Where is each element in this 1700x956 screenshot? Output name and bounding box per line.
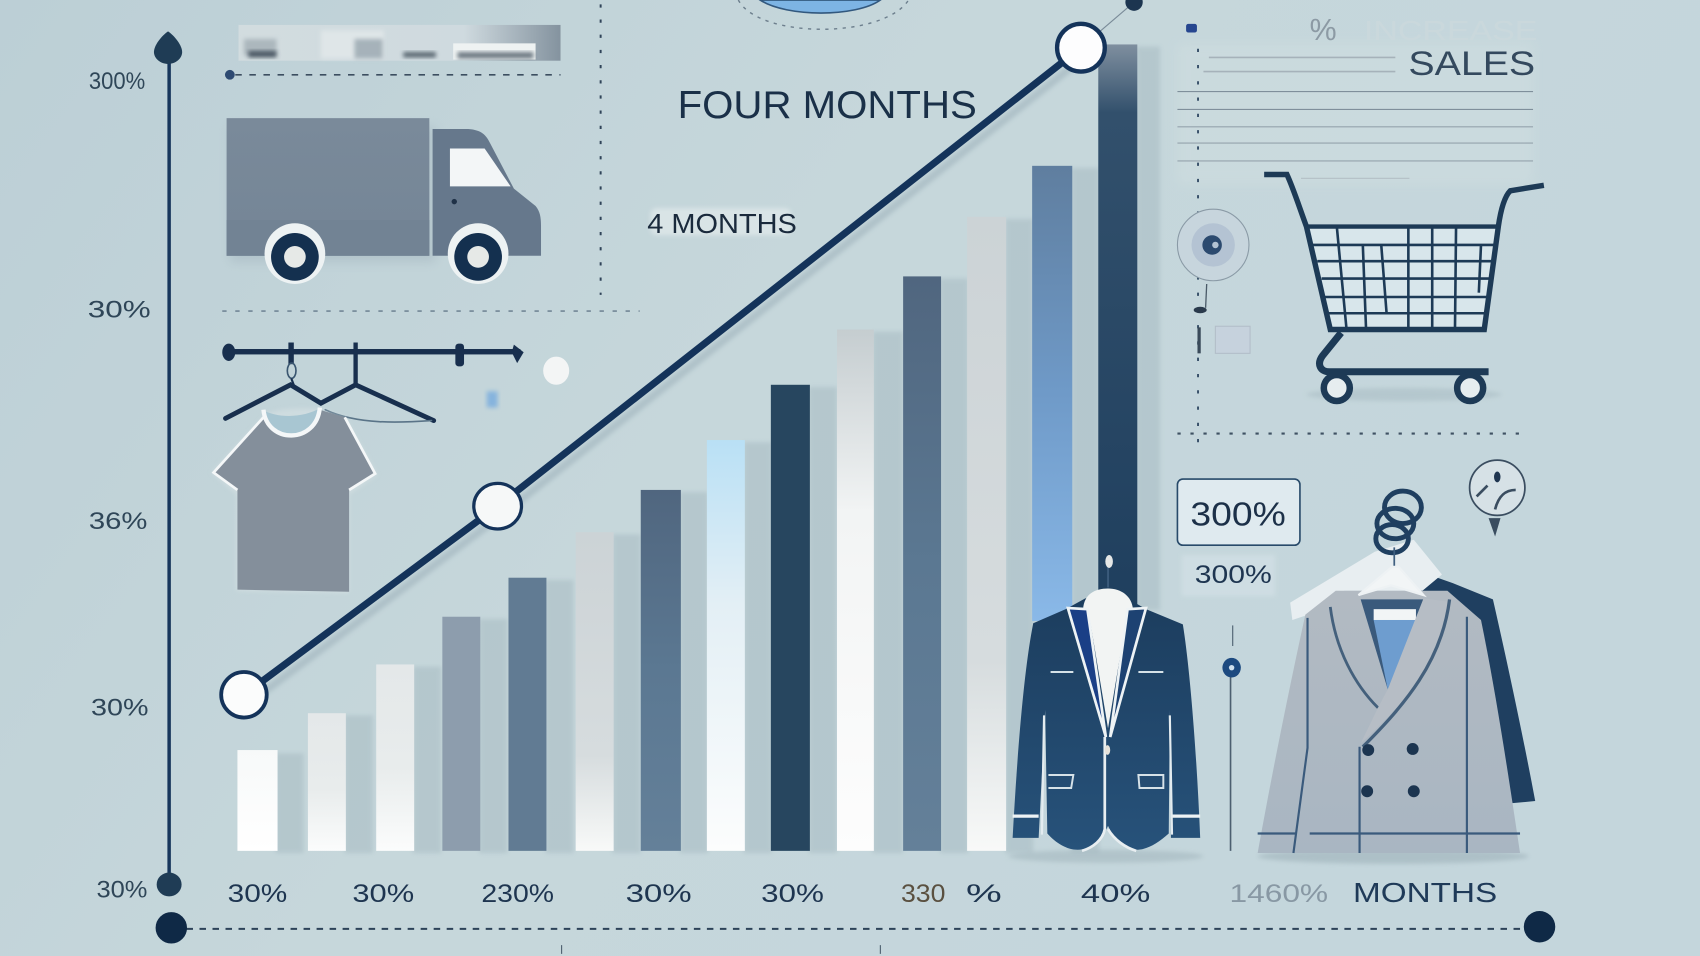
callout sub value — [1182, 555, 1275, 596]
label: percent increase, faded: % — [1310, 14, 1337, 47]
small white dot marker — [543, 357, 569, 385]
vertical dashed divider — [600, 4, 602, 295]
coat buttons — [1361, 743, 1420, 797]
label: percent increase, faded — [1310, 14, 1537, 47]
label: 4 months: 4 MONTHS — [647, 207, 797, 239]
axis labels — [88, 68, 151, 903]
axis labels: 30% — [91, 694, 149, 721]
growth trend line with nodes — [221, 0, 1143, 718]
jacket pin — [1107, 564, 1109, 587]
bar shadows — [275, 47, 1160, 853]
coat seams — [1258, 617, 1520, 853]
truck cab — [433, 129, 541, 256]
cart basket fill — [1306, 227, 1498, 330]
white hanger — [1358, 567, 1424, 595]
jacket body — [1013, 598, 1200, 850]
icon: delivery truck — [227, 118, 541, 284]
jacket front seam — [1082, 737, 1136, 851]
jacket inner — [1361, 599, 1424, 689]
horizontal timeline axis — [156, 911, 1555, 954]
x-axis month labels: 230% — [481, 880, 554, 908]
hanger rings — [1376, 491, 1421, 553]
small pale square — [1197, 326, 1250, 353]
callout: 300% box: 300% — [1190, 497, 1286, 534]
hangers — [226, 363, 434, 422]
back navy garment — [1413, 569, 1535, 803]
callout: 300% box — [1177, 479, 1300, 545]
jacket lapels — [1068, 608, 1106, 737]
bars rising over time — [237, 750, 278, 851]
icon: target badge — [1177, 209, 1249, 313]
label: percent increase, faded: INCREASE — [1364, 14, 1537, 46]
callout sub value: 300% — [1195, 561, 1272, 589]
cart grid — [1312, 245, 1494, 313]
x-axis month labels: 40% — [1081, 880, 1150, 908]
top right sales panel lines — [1177, 24, 1533, 455]
axis labels: 300% — [89, 68, 145, 95]
label: sales: SALES — [1408, 45, 1535, 83]
x-axis month labels: 30% — [352, 880, 414, 908]
truck window — [450, 148, 511, 186]
heading: four months: FOUR MONTHS — [678, 84, 977, 127]
icon: navy suit jacket — [1008, 555, 1203, 863]
horizontal dotted divider — [222, 310, 640, 312]
icon: shopping cart — [1264, 175, 1544, 401]
truck wheels — [265, 223, 508, 284]
x-axis month labels: MONTHS — [1353, 876, 1497, 908]
grey jacket body — [1258, 591, 1520, 853]
axis labels: 30% — [96, 876, 147, 903]
lapel seams — [1330, 607, 1378, 708]
x-axis month labels: 1460% — [1229, 880, 1328, 908]
vertical axis with ends — [154, 31, 182, 896]
axis labels: 30% — [88, 297, 151, 324]
x-axis month labels: 30% — [761, 880, 824, 908]
horizontal dotted divider right — [1177, 433, 1529, 435]
icon: clothes rail with hangers and t-shirt — [211, 343, 524, 593]
top center partial blue circle — [738, 0, 909, 29]
x-axis month labels: % — [966, 880, 1002, 908]
cart wheels — [1324, 375, 1483, 401]
t-shirt — [211, 409, 377, 593]
jacket shirt — [1083, 589, 1133, 728]
back white garment — [1290, 540, 1442, 620]
x-axis month labels: 30% — [626, 880, 692, 908]
blurred shelf strip — [225, 25, 561, 80]
x-axis month labels: 330 — [901, 880, 945, 908]
axis labels: 36% — [89, 508, 147, 535]
cart frame — [1264, 175, 1544, 330]
small blue square marker — [487, 391, 498, 408]
icon: grey double breasted jacket on hangers — [1258, 491, 1535, 864]
x-axis month labels — [228, 876, 1497, 908]
x-axis month labels: 30% — [228, 880, 287, 908]
vertical marker with dot — [1222, 625, 1241, 851]
clothes rail — [222, 343, 524, 386]
cart chassis — [1320, 333, 1489, 372]
jacket pockets and details — [1013, 672, 1200, 835]
truck cargo box — [227, 118, 429, 256]
icon: small round badge — [1470, 460, 1525, 537]
bar chart — [237, 44, 1160, 853]
